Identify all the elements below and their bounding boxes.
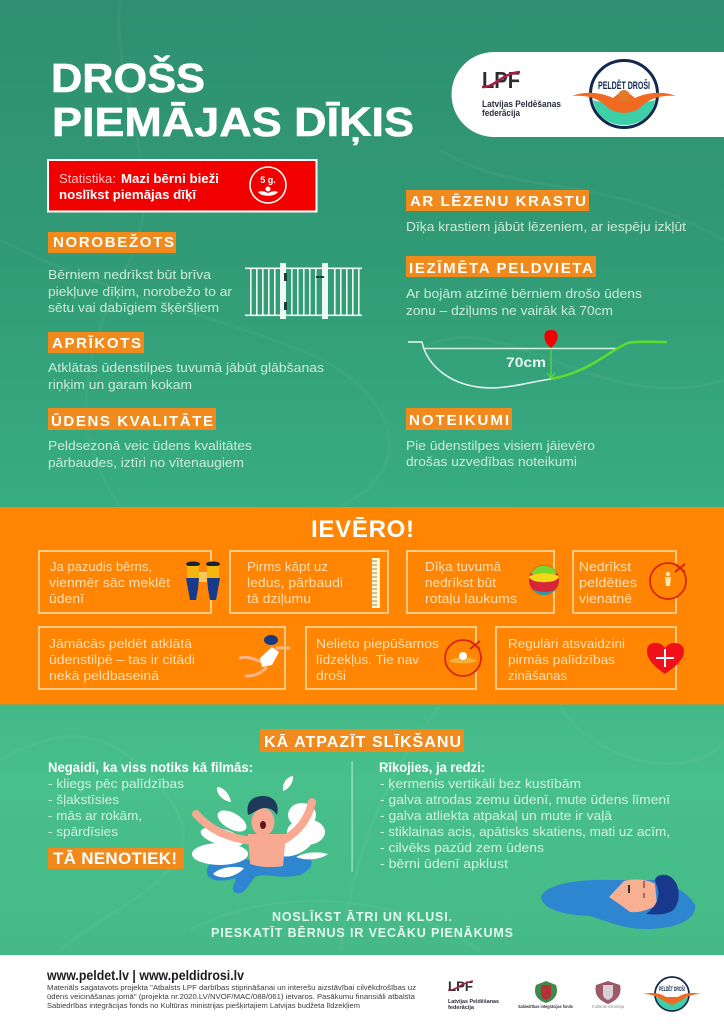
card: inflatables: droši (316, 668, 346, 683)
card: ice depth: Pirms kāpt uz (247, 559, 328, 574)
text block: warning signs: - ķermenis vertikāli bez kustībām (380, 776, 581, 791)
section: norobežots (48, 232, 362, 319)
heading: NOTEIKUMI (409, 412, 509, 429)
logo: peldēt droši small (643, 977, 701, 1011)
text block (406, 438, 595, 469)
callout: tā nenotiek: TĀ NENOTIEK! (53, 849, 177, 868)
card: playground: Dīķa tuvumā (425, 559, 502, 574)
logo: ministry of culture (592, 981, 624, 1010)
card: binoculars: vienmēr sāc meklēt (49, 575, 170, 590)
logo: LPF: federācija (482, 108, 521, 119)
text block (406, 286, 643, 318)
logo: integration fund: Sabiedrības integrācijas fonds (518, 1004, 573, 1010)
text block: film myths: - spārdīsies (48, 824, 119, 839)
closing message (211, 910, 513, 940)
text block: warning signs: Rīkojies, ja redzi: (379, 760, 485, 775)
card: binoculars (39, 551, 220, 613)
card: playground: nedrīkst būt (425, 575, 496, 590)
heading: NOROBEŽOTS (53, 233, 174, 251)
icon: heart (647, 643, 684, 674)
text block: pārbaudes, iztīri no vītenaugiem (48, 455, 244, 470)
card: alone (573, 551, 686, 613)
text block: sētu vai dabīgiem šķēršļiem (48, 300, 219, 315)
callout: statistics: Mazi bērni bieži (121, 171, 219, 186)
card: ice depth (230, 551, 388, 613)
heading: ŪDENS KVALITĀTE (51, 413, 213, 430)
icon: prohibited inflatable (445, 640, 481, 676)
funding note: ūdens veicināšanas jomā" (projekta nr.2020.LV/NVOF/MAC/088/061) ietvaros. Pasākumu finansiāli atbalsta (47, 992, 416, 1001)
logo: LPF small: federācija (448, 1005, 475, 1011)
logo: LPF: Latvijas Peldēšanas (482, 99, 561, 110)
text block: film myths: Negaidi, ka viss notiks kā filmās: (48, 760, 253, 775)
heading: IEVĒRO! (311, 516, 414, 543)
section: iezīmēta peldvieta (406, 256, 667, 388)
title: DROŠS (51, 55, 205, 101)
text block: warning signs: - cilvēks pazūd zem ūdens (380, 840, 545, 855)
text block (48, 360, 325, 392)
card: alone: Nedrīkst (579, 559, 631, 574)
heading: AR LĒZENU KRASTU (410, 193, 586, 210)
title: PIEMĀJAS DĪĶIS (52, 99, 414, 145)
website links: www.peldet.lv | www.peldidrosi.lv (46, 968, 244, 983)
text block: piekļuve dīķim, norobežo to ar (48, 284, 233, 299)
card: inflatables: Nelieto piepūšamos (316, 636, 440, 651)
text block: Atklātas ūdenstilpes tuvumā jābūt glābšanas (48, 360, 325, 375)
text block: film myths (48, 760, 253, 839)
callout: statistics: Statistika: (59, 171, 116, 186)
icon: depth ruler (372, 558, 380, 608)
card: open water (39, 627, 289, 689)
card: alone: peldēties (579, 575, 638, 590)
text block: film myths: - šļakstīsies (48, 792, 120, 807)
section: aprīkots (48, 332, 325, 392)
text block: Peldsezonā veic ūdens kvalitātes (48, 438, 253, 453)
text block: warning signs: - galva atrodas zemu ūdenī, mute ūdens līmenī (380, 792, 670, 807)
illustration: drowning child myth (192, 776, 328, 893)
footer (0, 955, 724, 1024)
card: ice depth: tā dziļumu (247, 591, 311, 606)
icon: fence (245, 263, 362, 319)
card: binoculars: Ja pazudis bērns, (50, 559, 152, 574)
logo: LPF small: Latvijas Peldēšanas (448, 999, 499, 1005)
text block: Bērniem nedrīkst būt brīva (48, 267, 212, 282)
heading: IEZĪMĒTA PELDVIETA (409, 260, 593, 277)
logo: Peldēt droši: PELDĒT DROŠI (598, 79, 650, 92)
text block: warning signs (379, 760, 670, 871)
section: ūdens kvalitāte (48, 408, 253, 470)
logo: LPF (482, 67, 561, 119)
card: playground (407, 551, 559, 613)
text block: riņķim un garam kokam (48, 377, 192, 392)
icon: ball (529, 565, 559, 595)
card: first aid: pirmās palīdzības (508, 652, 616, 667)
card: open water: Jāmācās peldēt atklātā (49, 636, 193, 651)
card: playground: rotaļu laukums (425, 591, 518, 606)
heading: APRĪKOTS (52, 335, 141, 352)
icon: five seconds: 5 g. (260, 175, 276, 185)
text block: warning signs: - galva atliekta atpakaļ un mute ir vaļā (380, 808, 613, 823)
card: open water: ūdenstilpē – tas ir citādi (49, 652, 195, 667)
text block: Ar bojām atzīmē bērniem drošo ūdens (406, 286, 643, 301)
text block: Pie ūdenstilpes visiem jāievēro (406, 438, 595, 453)
text block: zonu – dziļums ne vairāk kā 70cm (406, 303, 613, 318)
text block: warning signs: - bērni ūdenī apklust (380, 856, 508, 871)
logo: LPF small: LPF (448, 978, 473, 994)
text block (48, 438, 253, 470)
text block: Dīķa krastiem jābūt lēzeniem, ar iespēju izkļūt (406, 219, 686, 234)
card: ice depth: ledus, pārbaudi (247, 575, 343, 590)
logo panel (452, 52, 724, 137)
card: open water: nekā peldbaseinā (49, 668, 160, 683)
funding note (47, 983, 416, 1010)
text block: film myths: - kliegs pēc palīdzības (48, 776, 185, 791)
panel: ievēro (0, 507, 724, 704)
callout: statistics: noslīkst piemājas dīķī (59, 187, 196, 202)
callout: statistics (48, 160, 316, 212)
card: first aid (496, 627, 684, 689)
chart: depth diagram (408, 330, 667, 388)
card: first aid: zināšanas (508, 668, 567, 683)
logo: Peldēt droši (572, 60, 676, 128)
chart: depth diagram: 70cm (506, 354, 546, 370)
logo: LPF: LPF (482, 67, 520, 93)
logo: integration fund (518, 981, 573, 1010)
text block (48, 267, 233, 315)
heading: kā atpazīt slīkšanu: KĀ ATPAZĪT SLĪKŠANU (264, 732, 461, 751)
logo: ministry of culture: Kultūras ministrija (592, 1004, 624, 1010)
icon: prohibited alone (650, 563, 686, 599)
divider (352, 761, 353, 872)
section: ar lēzenu krastu (406, 190, 686, 234)
closing message: PIESKATĪT BĒRNUS IR VECĀKU PIENĀKUMS (211, 926, 513, 940)
card: alone: vienatnē (579, 591, 632, 606)
icon: five seconds (250, 167, 286, 203)
card: first aid: Regulāri atsvaidzini (508, 636, 625, 651)
text block: warning signs: - stiklainas acis, apātisks skatiens, mati uz acīm, (380, 824, 670, 839)
icon: binoculars (186, 562, 220, 600)
funding note: Sabiedrības integrācijas fonds no Kultūras ministrijas piešķirtajiem Latvijas budžeta līdzekļiem (47, 1001, 360, 1010)
icon: swimming child (240, 635, 289, 676)
title (51, 55, 414, 145)
logo: LPF small (448, 978, 499, 1011)
section: noteikumi (406, 408, 595, 469)
text block: drošas uzvedības noteikumi (406, 454, 577, 469)
funding note: Materiāls sagatavots projekta "Atbalsts LPF darbības stiprināšanai un interešu aizstāvībai cilvēkdrošības uz (47, 983, 416, 992)
card: inflatables (306, 627, 481, 689)
illustration: floating head (541, 875, 695, 929)
card: inflatables: līdzekļus. Tie nav (316, 652, 420, 667)
logo: peldēt droši small: PELDĒT DROŠI (659, 985, 685, 993)
card: binoculars: ūdenī (49, 591, 84, 606)
closing message: NOSLĪKST ĀTRI UN KLUSI. (272, 910, 452, 924)
text block: film myths: - mās ar rokām, (48, 808, 142, 823)
